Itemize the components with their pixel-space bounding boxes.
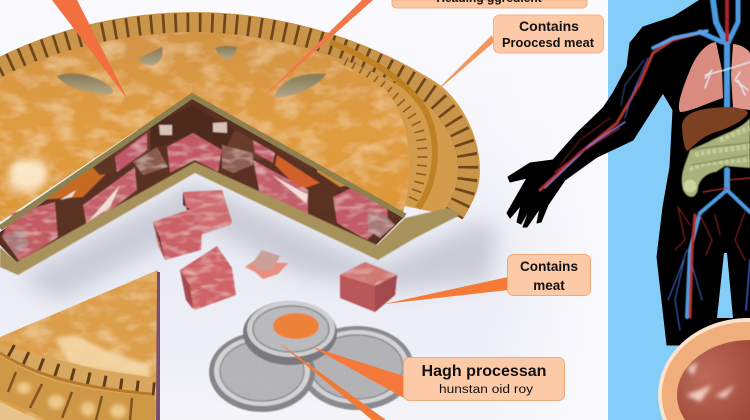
callout: high processing bbox=[404, 358, 564, 400]
meat filling blocks bbox=[2, 105, 395, 262]
bun highlights bbox=[17, 382, 126, 418]
arrow: lower leader bbox=[278, 342, 386, 420]
arrow: top-left leader bbox=[52, 0, 128, 100]
braided inner crimp bbox=[345, 62, 422, 205]
pie: main cut pie bbox=[0, 12, 480, 275]
left lung bbox=[679, 42, 723, 112]
meat cube A bbox=[183, 190, 232, 235]
body silhouette bbox=[507, 0, 750, 345]
arrow: top-centre leader bbox=[260, 0, 373, 100]
slice purple edge bbox=[156, 272, 160, 420]
callout: contains processed meat: Contains bbox=[519, 18, 579, 34]
filling cavity bbox=[0, 98, 405, 264]
top crust bbox=[0, 32, 409, 222]
callout: contains meat bbox=[508, 254, 590, 296]
meat cube B bbox=[153, 209, 202, 260]
metal discs bbox=[209, 301, 414, 412]
liver bbox=[682, 107, 748, 151]
right white fade strip bbox=[480, 0, 608, 420]
flour dusting bbox=[55, 335, 150, 378]
red surface bbox=[677, 340, 750, 420]
callout: contains processed meat bbox=[494, 15, 604, 53]
pie base wall bbox=[0, 162, 462, 275]
blood vessels: lungs bbox=[700, 0, 750, 108]
lower buns bbox=[0, 356, 155, 420]
crust cut edge bbox=[0, 96, 405, 228]
crust glare bbox=[8, 159, 48, 191]
ring flesh bbox=[662, 322, 750, 420]
right lung bbox=[731, 44, 750, 110]
figure: human body with organs bbox=[507, 0, 750, 345]
outer ring bbox=[658, 318, 750, 420]
upper crimp gaps bbox=[10, 350, 155, 389]
arrow: contains meat leader bbox=[384, 277, 508, 304]
left disc bbox=[209, 332, 315, 412]
panel: blue body background bbox=[608, 0, 750, 420]
wet meat piece bbox=[245, 250, 288, 279]
callout: contains meat: meat bbox=[533, 278, 565, 293]
meat cube D bbox=[340, 262, 397, 312]
top disc bbox=[243, 301, 337, 365]
orange powder bbox=[273, 313, 319, 339]
crimped rim bbox=[0, 12, 480, 218]
callout: high processing: hunstan oid roy bbox=[439, 384, 533, 396]
arrow: processed meat leader bbox=[430, 35, 494, 97]
highlights bbox=[686, 362, 735, 402]
leg gap bbox=[717, 253, 733, 318]
callout: contains meat: Contains bbox=[520, 259, 578, 274]
crimp band bbox=[0, 353, 152, 394]
slice crust bbox=[0, 270, 160, 420]
upper crimp band bbox=[0, 345, 155, 396]
shadow under pie bbox=[20, 180, 500, 300]
steam vents bbox=[57, 46, 326, 97]
inset: tongue / tissue close-up bbox=[658, 318, 750, 420]
slice of pie bottom-left bbox=[0, 270, 160, 420]
cream lower corner bbox=[0, 402, 36, 420]
inner gold band bbox=[330, 42, 435, 208]
callout: top ingredient bbox=[392, 0, 587, 8]
bun gaps bbox=[8, 372, 132, 420]
intestines bbox=[682, 118, 750, 197]
callout: high processing: Hagh processan bbox=[422, 363, 546, 380]
arm and leg blood vessels bbox=[540, 31, 750, 330]
arrow: processing leader bbox=[312, 347, 404, 398]
right disc bbox=[300, 326, 414, 410]
callout: contains processed meat: Proocesd meat bbox=[502, 36, 595, 50]
meat cube C bbox=[180, 246, 236, 310]
